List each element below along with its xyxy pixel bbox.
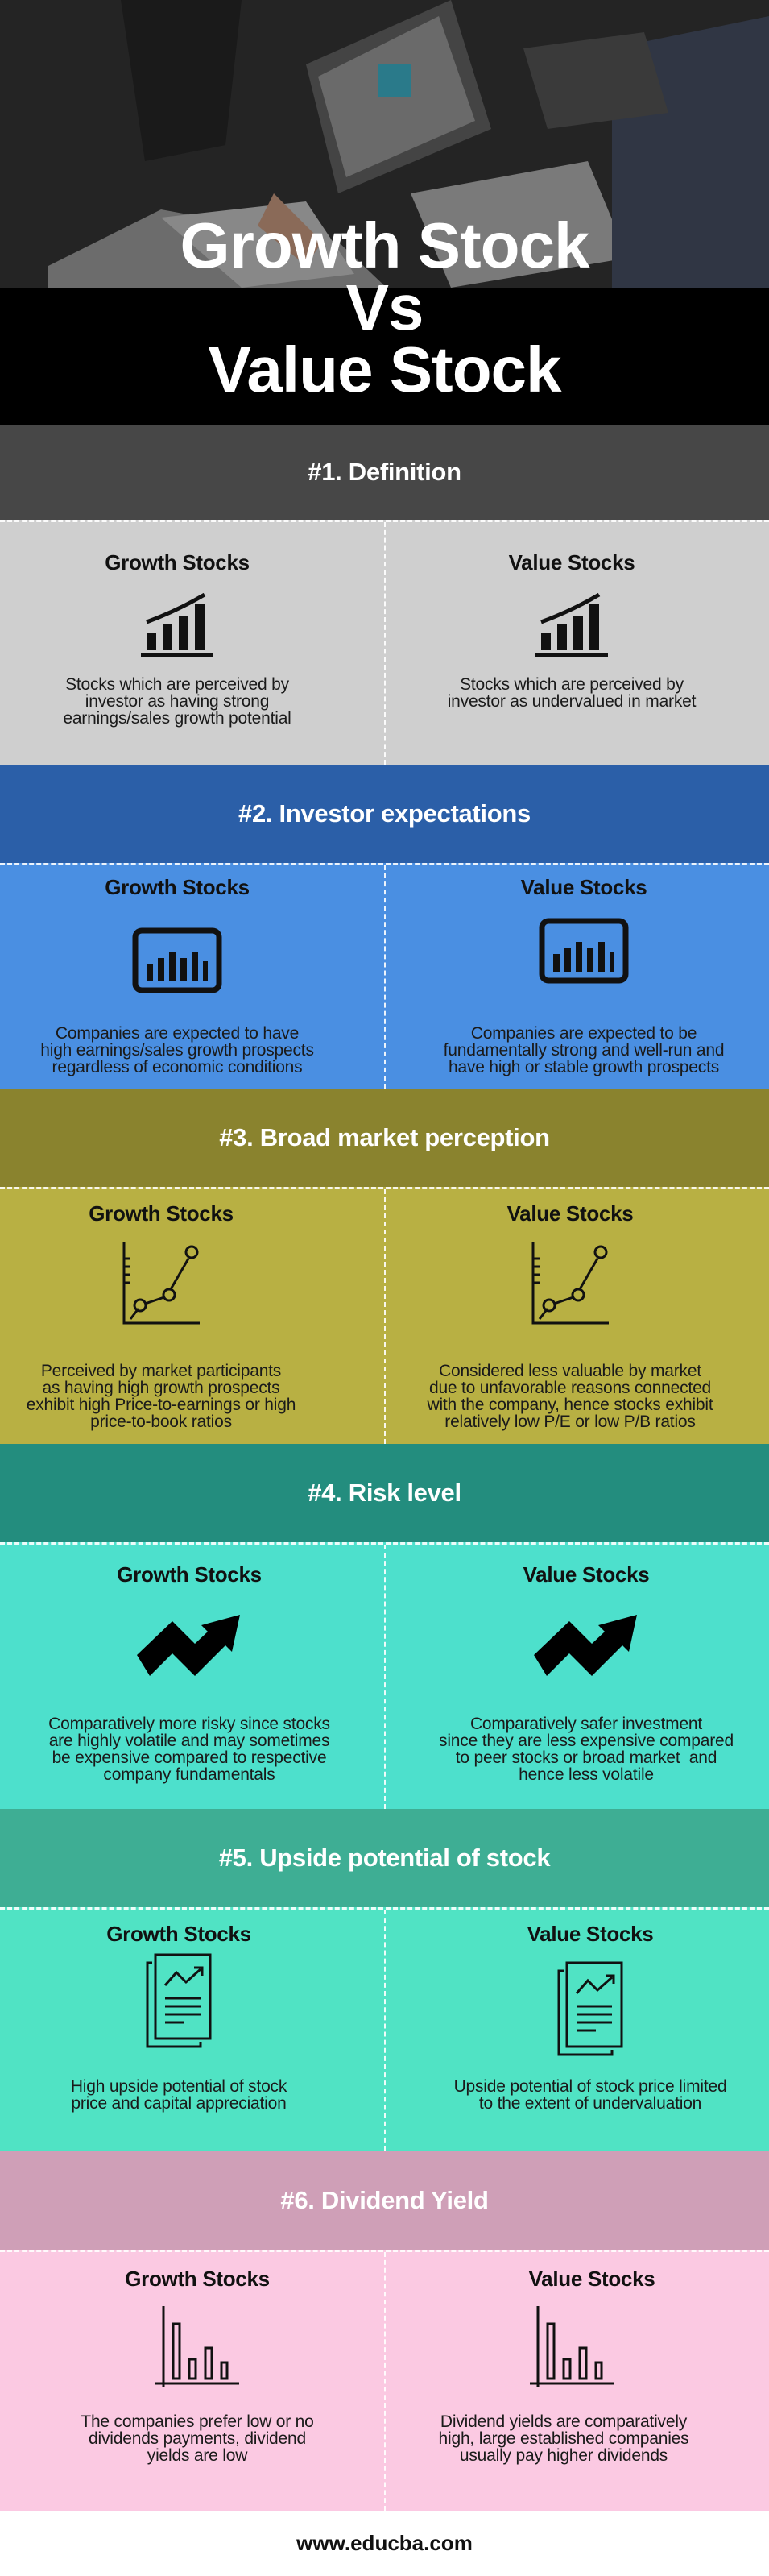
growth column: Growth Stocks [89, 1201, 234, 1226]
icon: declining bar chart [155, 2306, 239, 2387]
growth column [71, 1922, 287, 2113]
growth column: price and capital appreciation [71, 2094, 287, 2113]
growth column: Growth Stocks [105, 875, 250, 899]
value column [448, 550, 696, 711]
growth column: exhibit high Price-to-earnings or high [27, 1396, 296, 1414]
growth column: dividends payments, dividend [89, 2429, 306, 2448]
value column: Considered less valuable by market [439, 1362, 701, 1380]
value column [427, 1201, 713, 1431]
value column: Value Stocks [529, 2267, 655, 2291]
growth column: be expensive compared to respective [52, 1748, 326, 1767]
growth column: Perceived by market participants [41, 1362, 281, 1380]
value column: to the extent of undervaluation [479, 2094, 701, 2113]
section 4 content [0, 1542, 769, 1809]
growth column: Growth Stocks [117, 1562, 262, 1587]
value column: have high or stable growth prospects [449, 1058, 719, 1076]
growth column: Growth Stocks [125, 2267, 270, 2291]
value column: fundamentally strong and well-run and [444, 1041, 724, 1060]
section 4 header: #4. Risk level [308, 1479, 461, 1507]
value column: Stocks which are perceived by [460, 675, 684, 694]
hero photo background [0, 0, 769, 288]
section 3 content [0, 1187, 769, 1444]
growth column: High upside potential of stock [71, 2077, 287, 2096]
icon: bar chart rising [141, 593, 213, 657]
value column: high, large established companies [439, 2429, 688, 2448]
growth column: regardless of economic conditions [52, 1058, 302, 1076]
growth column [48, 1562, 330, 1784]
section 1 content [0, 520, 769, 765]
icon: monitor chart [540, 919, 628, 983]
section 3 header: #3. Broad market perception [219, 1123, 550, 1151]
black title band [0, 288, 769, 425]
growth column [63, 550, 291, 728]
growth column: high earnings/sales growth prospects [40, 1041, 314, 1060]
growth column [81, 2267, 314, 2465]
section 6 content [0, 2250, 769, 2511]
section 2 header [0, 765, 769, 863]
value column [454, 1922, 726, 2113]
growth column: The companies prefer low or no [81, 2412, 314, 2431]
section 4 header [0, 1444, 769, 1542]
growth column: yields are low [147, 2446, 247, 2465]
title: Value Stock [208, 334, 561, 405]
value column: Comparatively safer investment [470, 1715, 702, 1733]
growth column [27, 1201, 296, 1431]
value column: with the company, hence stocks exhibit [427, 1396, 713, 1414]
growth column: Comparatively more risky since stocks [48, 1715, 330, 1733]
value column [443, 875, 724, 1076]
section 6 header: #6. Dividend Yield [280, 2185, 489, 2214]
value column: relatively low P/E or low P/B ratios [444, 1412, 696, 1431]
value column: due to unfavorable reasons connected [429, 1379, 711, 1397]
icon: bar chart rising [535, 593, 608, 657]
value column: Value Stocks [523, 1562, 649, 1587]
growth column: investor as having strong [85, 692, 269, 711]
icon: report document [147, 1953, 211, 2048]
icon: zigzag arrow [534, 1615, 637, 1676]
icon: line graph [122, 1242, 200, 1325]
growth column: Growth Stocks [105, 550, 250, 575]
value column: Value Stocks [507, 1201, 633, 1226]
icon: zigzag arrow [137, 1615, 240, 1676]
growth column: Stocks which are perceived by [65, 675, 289, 694]
growth column: Companies are expected to have [56, 1024, 299, 1043]
title: Growth Stock [180, 209, 589, 281]
value column: Upside potential of stock price limited [454, 2077, 726, 2096]
value column: since they are less expensive compared [439, 1732, 734, 1750]
growth column: as having high growth prospects [42, 1379, 279, 1397]
value column: Value Stocks [527, 1922, 653, 1946]
value column: Value Stocks [509, 550, 635, 575]
section 3 header [0, 1089, 769, 1187]
value column: investor as undervalued in market [448, 692, 696, 711]
value column: usually pay higher dividends [460, 2446, 668, 2465]
value column [439, 2267, 688, 2465]
section 5 content [0, 1907, 769, 2151]
section 1 header [0, 425, 769, 520]
title [180, 209, 589, 405]
title: Vs [346, 272, 423, 343]
value column [439, 1562, 734, 1784]
growth column: Growth Stocks [106, 1922, 251, 1946]
value column: Dividend yields are comparatively [440, 2412, 687, 2431]
icon: report document [557, 1961, 623, 2056]
icon: line graph [531, 1242, 609, 1325]
value column: Companies are expected to be [471, 1024, 697, 1043]
section 1 header: #1. Definition [308, 458, 461, 486]
section 5 header: #5. Upside potential of stock [219, 1844, 550, 1872]
growth column: earnings/sales growth potential [63, 709, 291, 728]
section 2 content [0, 863, 769, 1089]
value column: to peer stocks or broad market and [456, 1748, 717, 1767]
icon: declining bar chart [530, 2306, 614, 2387]
section 5 header [0, 1809, 769, 1907]
section 6 header [0, 2151, 769, 2250]
growth column: company fundamentals [103, 1765, 275, 1784]
icon: monitor chart [132, 928, 222, 993]
growth column: are highly volatile and may sometimes [49, 1732, 329, 1750]
section 2 header: #2. Investor expectations [238, 799, 531, 828]
growth column [40, 875, 314, 1076]
value column: hence less volatile [519, 1765, 654, 1784]
footer url: www.educba.com [296, 2531, 473, 2555]
value column: Value Stocks [521, 875, 647, 899]
growth column: price-to-book ratios [90, 1412, 232, 1431]
